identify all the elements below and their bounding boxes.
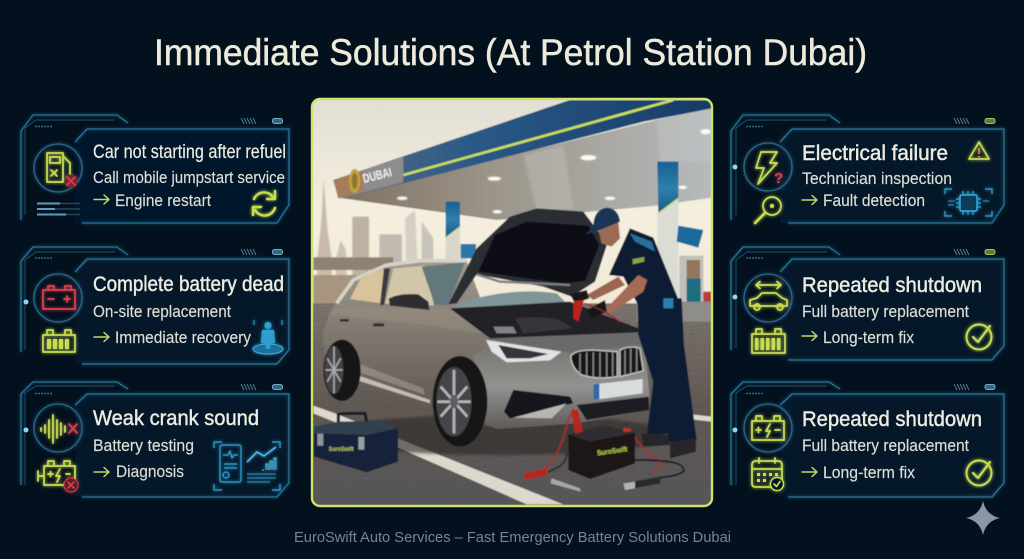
photo number plate [593, 379, 643, 400]
photo door handles [340, 319, 384, 326]
photo canopy sign panel [342, 156, 404, 198]
photo fuel pump [679, 255, 704, 302]
photo mechanic gloves [570, 290, 607, 318]
photo battery label: SuroSwift [596, 444, 628, 458]
icon: lime battery [43, 330, 75, 352]
icon: dead red battery [34, 274, 82, 322]
photo lower bumper intakes [504, 390, 573, 418]
icon: lime battery [752, 329, 785, 353]
panel: central photo of mechanic jump-starting a car at a Dubai petrol station [310, 95, 715, 507]
outcome text: Long-term fix [823, 463, 915, 482]
photo canopy lime stripe [403, 100, 673, 175]
heading: repeated shutdown: Repeated shutdown [802, 407, 982, 431]
photo mechanic cap [585, 208, 620, 235]
solution text: On-site replacement [93, 302, 231, 321]
photo rear wheel [323, 340, 361, 401]
photo Dubai skyline [317, 178, 433, 282]
photo red and black clamps [523, 300, 661, 492]
arrow [802, 468, 817, 476]
solution text: Battery testing [93, 436, 194, 455]
outcome text: Long-term fix [823, 328, 914, 347]
photo right column [657, 162, 678, 213]
heading: electrical failure: Electrical failure [802, 141, 948, 165]
outcome text: Immediate recovery [115, 328, 251, 347]
icon: calendar with check [752, 458, 784, 490]
photo parking line [313, 406, 563, 504]
photo overpass [313, 257, 393, 270]
icon: lightning bolt with question mark [744, 143, 792, 191]
photo jumper cables [543, 303, 684, 478]
photo grille [571, 347, 643, 378]
heading: complete battery dead: Complete battery dead [93, 272, 284, 296]
photo canopy underside [338, 107, 712, 220]
icon: magnifying glass [755, 197, 781, 223]
photo mechanic shoes [642, 433, 696, 458]
photo lime frame [312, 99, 712, 506]
icon: sparkle watermark [966, 501, 1000, 535]
icon: battery charge [744, 404, 792, 452]
icon: refresh [253, 191, 275, 216]
photo hood inner rib [477, 274, 570, 285]
photo small signs [677, 226, 703, 248]
icon: hologram figure [253, 320, 283, 354]
icon: battery with red cross [38, 461, 78, 492]
photo pavement [310, 303, 715, 507]
title: Immediate Solutions (At Petrol Station Dubai) [154, 32, 867, 73]
panel frame [21, 115, 289, 223]
panel frame [731, 247, 1004, 360]
icon: check mark [966, 460, 992, 486]
panel: car not starting after refuel [21, 115, 289, 223]
icon: fuel pump with red cross [34, 144, 82, 192]
photo car side highlight [357, 375, 430, 403]
photo engine bay [450, 302, 638, 338]
solution text: Technician inspection [802, 169, 952, 188]
photo car wing mirror [389, 294, 429, 310]
solution text: Full battery replacement [802, 436, 969, 455]
arrow [94, 332, 109, 342]
photo mechanic [570, 208, 697, 458]
photo hood inner dark [478, 222, 599, 283]
photo car roof highlight [337, 261, 467, 303]
arrow [94, 468, 109, 476]
panel: repeated shutdown, calendar [731, 382, 1004, 497]
photo centre column [446, 202, 460, 238]
photo windscreen under the hood [453, 291, 567, 310]
photo headlight [486, 340, 562, 362]
panel frame [731, 115, 1004, 223]
panel frame [731, 382, 1004, 497]
decorative progress bars [37, 204, 80, 214]
photo car shadow [363, 416, 669, 456]
photo DUBAI sign lettering: DUBAI [361, 165, 393, 186]
photo open hood [448, 208, 607, 304]
outcome text: Fault detection [823, 191, 925, 210]
icon: car with arrows [744, 274, 792, 322]
photo car bonnet [490, 332, 642, 352]
photo mechanic badge [633, 257, 644, 264]
panel: weak crank sound [21, 382, 289, 497]
photo car windows [350, 268, 387, 303]
panel: electrical failure [731, 115, 1004, 223]
icon: warning triangle [969, 142, 989, 159]
photo mechanic arms [587, 277, 625, 300]
photo toolbox label: SuroSwift [329, 446, 354, 453]
panel: complete battery dead [21, 247, 289, 364]
icon: circuit chip [945, 189, 992, 216]
photo canopy blue fascia [359, 100, 711, 194]
photo mechanic head [598, 222, 620, 247]
panel: repeated shutdown, car [731, 247, 1004, 360]
solution text: Full battery replacement [802, 302, 969, 321]
footer caption: EuroSwift Auto Services – Fast Emergency Battery Solutions Dubai [294, 529, 731, 546]
heading: repeated shutdown: Repeated shutdown [802, 273, 982, 297]
icon: lightning bolt with question mark: ? [774, 170, 783, 187]
photo car bumper [473, 343, 649, 429]
outcome text: Engine restart [115, 191, 211, 210]
panel frame [21, 382, 289, 497]
photo toolbox [314, 413, 398, 472]
heading: weak crank sound: Weak crank sound [93, 406, 259, 430]
panel frame [21, 247, 289, 364]
photo sky [310, 95, 715, 315]
photo front wheel [433, 356, 487, 447]
arrow [802, 196, 817, 204]
solution text: Call mobile jumpstart service [93, 168, 285, 187]
arrow [94, 195, 109, 204]
icon: waveform with red cross [34, 404, 82, 452]
photo car body [323, 261, 517, 427]
icon: check mark [966, 324, 992, 350]
photo canopy lights [397, 129, 711, 213]
icon: diagnostic dashboard [214, 442, 280, 490]
outcome text: Diagnosis [116, 462, 184, 481]
photo mechanic shirt [609, 228, 680, 306]
photo mechanic trousers [637, 297, 697, 442]
arrow [802, 332, 817, 340]
heading: car not starting after refuel: Car not starting after refuel [93, 141, 286, 163]
photo car battery [568, 426, 635, 479]
